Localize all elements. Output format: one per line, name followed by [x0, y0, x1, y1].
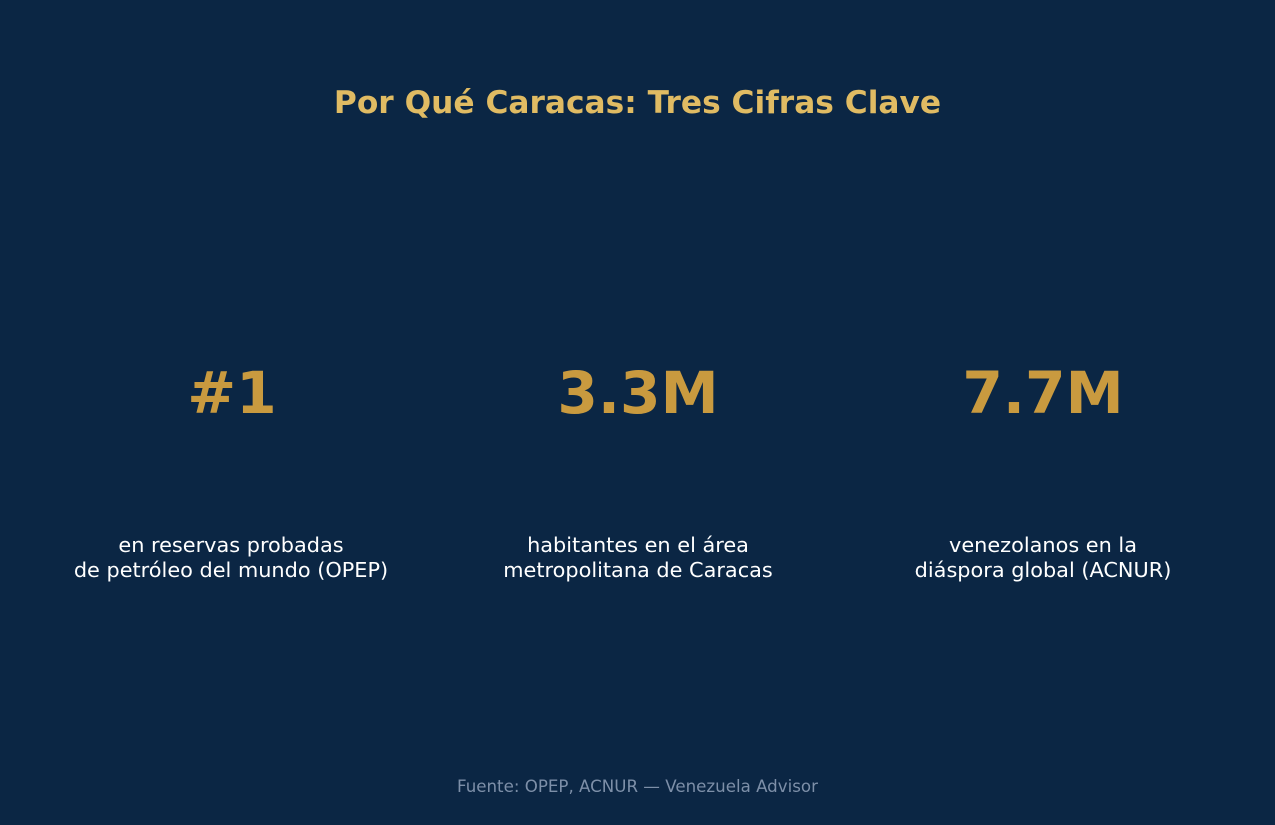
stat 2 description: habitantes en el área: [527, 533, 749, 557]
stat 3 description: [915, 533, 1171, 582]
title: Por Qué Caracas: Tres Cifras Clave: [334, 85, 941, 121]
stat 2 description: [503, 533, 773, 582]
stat 2 value: 3.3M: [557, 359, 719, 427]
stat 3 description: venezolanos en la: [949, 533, 1137, 557]
source note: Fuente: OPEP, ACNUR — Venezuela Advisor: [457, 777, 818, 796]
stat 1 description: de petróleo del mundo (OPEP): [74, 558, 388, 582]
stat 1 value: #1: [187, 359, 277, 427]
stat 1 description: en reservas probadas: [118, 533, 344, 557]
stat 3 description: diáspora global (ACNUR): [915, 558, 1171, 582]
stat 1 description: [74, 533, 388, 582]
stat 3 value: 7.7M: [962, 359, 1124, 427]
stat 2 description: metropolitana de Caracas: [503, 558, 773, 582]
